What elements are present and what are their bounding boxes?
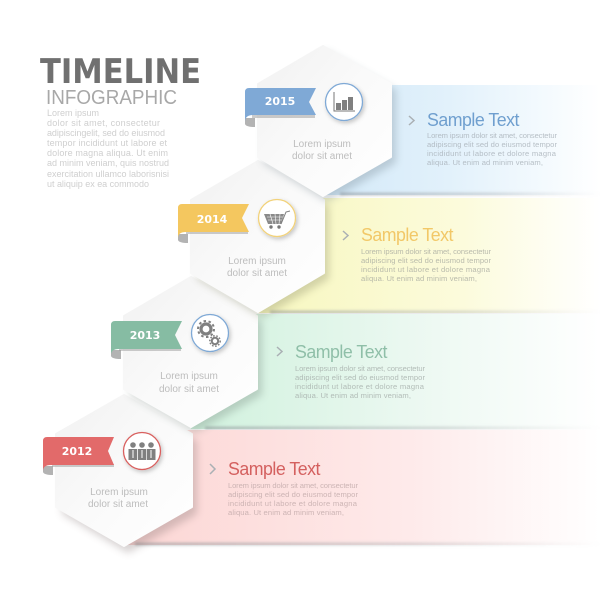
text block 2015: aliqua. Ut enim ad minim veniam,: [427, 158, 543, 167]
ribbon 2012: 2012: [62, 445, 92, 458]
text block 2013: [295, 364, 425, 400]
icon: shopping cart: [258, 200, 296, 236]
panel: 2012 band: [124, 430, 600, 546]
text block 2012: incididunt ut labore et dolore magna: [228, 499, 358, 508]
text block 2014: Lorem ipsum dolor sit amet, consectetur: [361, 247, 491, 256]
intro paragraph: adipiscingelit, sed do eiusmod: [47, 128, 165, 138]
text block 2015: Lorem ipsum dolor sit amet, consectetur: [427, 131, 557, 140]
hexagon caption: Lorem ipsum: [293, 139, 351, 150]
hexagon caption: dolor sit amet: [159, 384, 219, 395]
text block 2013: adipiscing elit sed do eiusmod tempor: [295, 373, 425, 382]
text block 2012: [228, 481, 358, 517]
text block 2013: incididunt ut labore et dolore magna: [295, 382, 425, 391]
intro paragraph: exercitation ullamco laborisnisi: [47, 169, 169, 179]
icon: gears: [192, 314, 228, 352]
ribbon 2013: 2013: [130, 329, 160, 342]
subtitle: INFOGRAPHIC: [46, 87, 177, 109]
panel: 2014 band: [258, 198, 600, 314]
intro paragraph: Lorem ipsum: [47, 108, 99, 118]
heading: 2012 sample text: Sample Text: [228, 459, 320, 479]
chevron 2012: [210, 464, 215, 474]
heading: 2013 sample text: Sample Text: [295, 342, 387, 362]
text block 2012: adipiscing elit sed do eiusmod tempor: [228, 490, 358, 499]
intro paragraph: tempor incididunt ut labore et: [47, 138, 167, 148]
text block 2014: adipiscing elit sed do eiusmod tempor: [361, 256, 491, 265]
hexagon caption: dolor sit amet: [88, 499, 148, 510]
text block 2015: [427, 131, 557, 167]
hexagon caption: Lorem ipsum: [228, 256, 286, 267]
hexagon caption: dolor sit amet: [292, 151, 352, 162]
hexagon caption: Lorem ipsum: [90, 487, 148, 498]
icon: bar chart: [326, 84, 362, 120]
hexagon caption: Lorem ipsum: [160, 371, 218, 382]
text block 2014: aliqua. Ut enim ad minim veniam,: [361, 274, 477, 283]
text block 2012: Lorem ipsum dolor sit amet, consectetur: [228, 481, 358, 490]
heading: 2014 sample text: Sample Text: [361, 225, 453, 245]
hexagon caption: dolor sit amet: [227, 268, 287, 279]
text block 2013: aliqua. Ut enim ad minim veniam,: [295, 391, 411, 400]
ribbon 2014: 2014: [197, 213, 228, 226]
hexagon 2014: [191, 161, 329, 318]
heading: 2015 sample text: Sample Text: [427, 110, 519, 130]
text block 2014: [361, 247, 491, 283]
text block 2012: aliqua. Ut enim ad minim veniam,: [228, 508, 344, 517]
ribbon 2015: 2015: [265, 95, 295, 108]
intro paragraph: [47, 108, 169, 189]
hexagon 2013: [124, 277, 262, 433]
hexagon 2012: [56, 395, 197, 553]
title: TIMELINE: [40, 52, 201, 92]
intro paragraph: dolore magna aliqua. Ut enim: [47, 148, 168, 158]
ribbon 2012: [43, 437, 114, 475]
chevron 2015: [409, 116, 414, 125]
panel: 2015 band: [325, 85, 600, 196]
text block 2014: incididunt ut labore et dolore magna: [361, 265, 491, 274]
ribbon 2013: [111, 321, 182, 359]
ribbon 2015: [245, 88, 316, 127]
hexagon 2015: [258, 46, 396, 202]
intro paragraph: ut aliquip ex ea commodo: [47, 179, 149, 189]
text block 2013: Lorem ipsum dolor sit amet, consectetur: [295, 364, 425, 373]
chevron 2013: [277, 347, 282, 356]
text block 2015: incididunt ut labore et dolore magna: [427, 149, 557, 158]
ribbon 2014: [178, 204, 249, 243]
text block 2015: adipiscing elit sed do eiusmod tempor: [427, 140, 557, 149]
chevron 2014: [343, 231, 348, 240]
panel: 2013 band: [191, 314, 600, 430]
intro paragraph: dolor sit amet, consectetur: [47, 118, 160, 128]
icon: people: [124, 432, 160, 470]
intro paragraph: ad minim veniam, quis nostrud: [47, 158, 169, 168]
